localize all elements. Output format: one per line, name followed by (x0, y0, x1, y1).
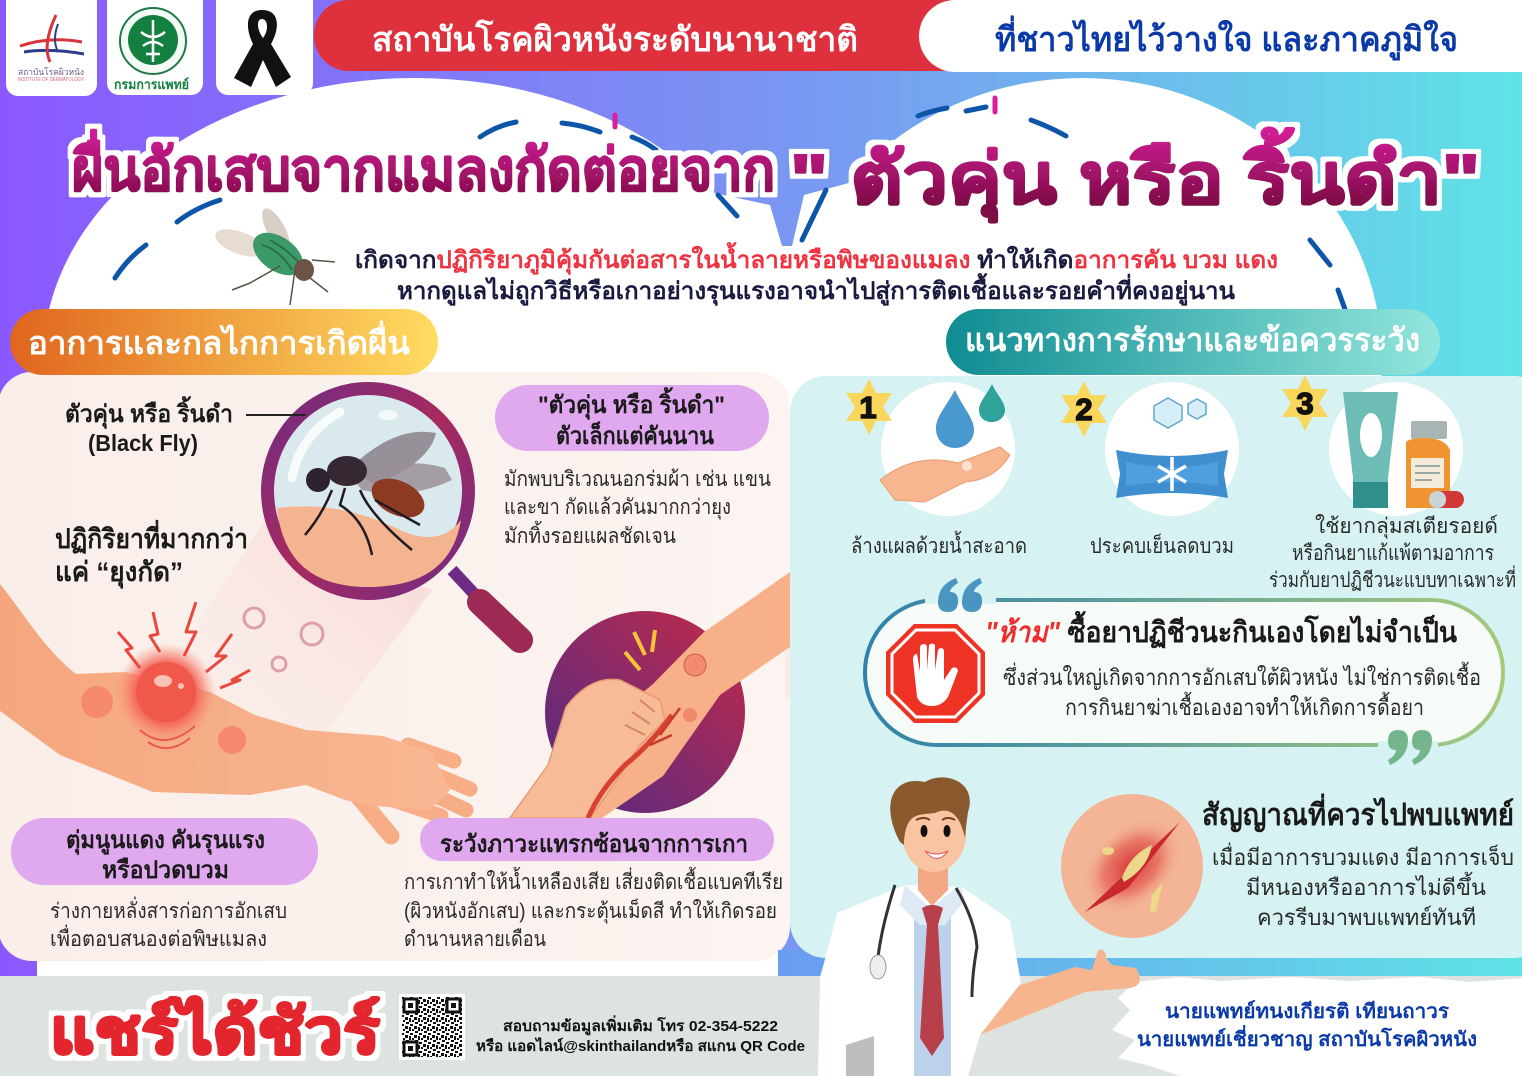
contact details (476, 1015, 805, 1055)
illustration: magnifier with black fly (261, 382, 520, 640)
text: where bites appear: และขา กัดแล้วคันมากกว่ายุง (504, 496, 731, 520)
callout: scratching complications (420, 818, 774, 861)
illustration: doctor (818, 777, 1140, 1076)
panel: treatment and cautions (778, 375, 1522, 977)
white slogan banner: ที่ชาวไทยไว้วางใจ และภาคภูมิใจ (995, 15, 1458, 61)
black fly (305, 432, 452, 555)
text: where bites appear (504, 468, 771, 548)
callout: bump and swelling (11, 818, 318, 885)
red banner: สถาบันโรคผิวหนังระดับนานาชาติ (372, 19, 858, 59)
callout: bump and swelling: ตุ่มนูนแดง คันรุนแรง (66, 827, 265, 856)
share slogan: แชร์ได้ชัวร์ (50, 996, 380, 1067)
callout: small but itchy: "ตัวคุ่น หรือ ริ้นดำ" (538, 386, 725, 421)
doctor credit (1137, 1000, 1477, 1051)
text: inflammatory response (50, 896, 287, 951)
label: black fly: (Black Fly) (88, 430, 198, 456)
illustration: bitten arm (0, 584, 470, 836)
coat (818, 885, 1021, 1076)
arm (0, 584, 450, 810)
text: scratching effects: (ผิวหนังอักเสบ) และกระตุ้นเม็ดสี ทำให้เกิดรอย (404, 897, 777, 924)
warning text: ซึ่งส่วนใหญ่เกิดจากการอักเสบใต้ผิวหนัง ไม่ใช่การติดเชื้อ (1003, 662, 1481, 690)
logo: institute of dermatology: INSTITUTE OF DERMATOLOGY (18, 77, 85, 83)
frame gaps (925, 600, 1438, 745)
title (72, 127, 1480, 223)
text: scratching effects (404, 867, 783, 951)
pointer tail (785, 622, 842, 700)
qr code (399, 994, 465, 1060)
doctor credit: นายแพทย์เชี่ยวชาญ สถาบันโรคผิวหนัง (1137, 1024, 1477, 1051)
face (916, 818, 955, 858)
icon: opening quote (938, 578, 982, 612)
text: where bites appear: มักพบบริเวณนอกร่มผ้า เช่น แขน (504, 468, 771, 491)
intro line 1: เกิดจากปฏิกิริยาภูมิคุ้มกันต่อสารในน้ำลายหรือพิษของแมลง ทำให้เกิดอาการคัน บวม แดง (355, 241, 1278, 276)
magnifier light cone (175, 520, 432, 780)
head (902, 796, 966, 872)
warning box (865, 578, 1503, 765)
icon: mourning ribbon (216, 0, 313, 95)
text: when to see a doctor: เมื่อมีอาการบวมแดง มีอาการเจ็บ (1212, 842, 1514, 870)
section pill: treatment: แนวทางการรักษาและข้อควรระวัง (965, 322, 1420, 358)
text: when to see a doctor (1202, 793, 1514, 930)
title line part 2: " ตัวคุ่น หรือ ริ้นดำ" (790, 127, 1480, 223)
text: scratching effects: การเกาทำให้น้ำเหลืองเสีย เสี่ยงติดเชื้อแบคทีเรีย (404, 867, 783, 894)
icon: stop hand (886, 624, 985, 723)
fingers (357, 745, 470, 836)
logo: department of medical services (107, 0, 203, 95)
callout: small but itchy: ตัวเล็กแต่คันนาน (556, 421, 715, 450)
warning box frame (865, 600, 1503, 745)
callout: scratching complications: ระวังภาวะแทรกซ้อนจากการเกา (440, 831, 748, 858)
neck (918, 865, 948, 906)
text: when to see a doctor: มีหนองหรืออาการไม่ดีขึ้น (1246, 872, 1486, 900)
shirt (914, 905, 951, 1076)
arm and hand (977, 950, 1140, 1036)
illustration: infected wound (1061, 794, 1203, 938)
step 2: cold compress: 2 (1075, 392, 1093, 427)
panel background (0, 372, 790, 961)
panel background (790, 376, 1522, 958)
section pill: treatment (946, 309, 1440, 375)
logo: institute of dermatology: สถาบันโรคผิวหนัง (18, 67, 84, 77)
footer (0, 976, 1522, 1076)
callout: small but itchy (495, 385, 769, 451)
icon: green fly (212, 205, 335, 305)
logo: department of medical services: กรมการแพทย์ (114, 77, 189, 92)
heading: stronger reaction (55, 519, 248, 589)
hair (890, 777, 970, 845)
heading: stronger reaction: ปฏิกิริยาที่มากกว่า (55, 519, 248, 554)
dashed cloud outline (115, 98, 1346, 312)
footer background (0, 976, 1522, 1076)
white slogan banner (919, 0, 1522, 72)
intro line 2: หากดูแลไม่ถูกวิธีหรือเกาอย่างรุนแรงอาจนำไปสู่การติดเชื้อและรอยคำที่คงอยู่นาน (397, 272, 1236, 307)
icon: closing quote (1388, 730, 1432, 765)
callout: bump and swelling: หรือปวดบวม (102, 857, 229, 884)
stethoscope (878, 885, 977, 997)
label: black fly (65, 395, 233, 456)
step 1: wash: 1 (859, 390, 877, 425)
folder (846, 1036, 874, 1076)
white brush patch (1112, 977, 1522, 1076)
contact details: หรือ แอดไลน์@skinthailandหรือ สแกน QR Code (476, 1036, 805, 1055)
logo: institute of dermatology (6, 0, 97, 96)
warning text: การกินยาฆ่าเชื้อเองอาจทำให้เกิดการดื้อยา (1065, 692, 1424, 720)
text: when to see a doctor: ควรรีบมาพบแพทย์ทันที (1257, 905, 1476, 930)
text: inflammatory response: ร่างกายหลั่งสารก่อการอักเสบ (50, 896, 287, 923)
illustration: scratching arm (510, 565, 800, 818)
tie (920, 905, 944, 1056)
step 3: medicine: ใช้ยากลุ่มสเตียรอยด์ (1315, 514, 1498, 539)
heading: stronger reaction: แค่ “ยุงกัด” (55, 557, 183, 589)
step 1: wash: ล้างแผลด้วยน้ำสะอาด (851, 531, 1027, 558)
step 2: cold compress: ประคบเย็นลดบวม (1090, 532, 1234, 558)
section pill: symptoms (10, 309, 438, 375)
step 2: cold compress (1061, 381, 1239, 558)
step 1: wash (846, 379, 1027, 558)
warning heading: "ห้าม" ซื้อยาปฏิชีวนะกินเองโดยไม่จำเป็น (985, 610, 1457, 649)
section pill: symptoms: อาการและกลไกการเกิดผื่น (28, 320, 410, 361)
title line part 1: ผื่นอักเสบจากแมลงกัดต่อยจาก (72, 129, 775, 203)
doctor credit: นายแพทย์ทนงเกียรติ เทียนถาวร (1165, 1000, 1449, 1023)
icon: pain rings (244, 608, 323, 671)
header bar (6, 0, 1522, 96)
contact details: สอบถามข้อมูลเพิ่มเติม โทร 02-354-5222 (503, 1015, 778, 1036)
red banner (314, 0, 994, 71)
strip below panel (778, 950, 1522, 977)
step 3: medicine: 3 (1296, 386, 1314, 421)
icon: pain lightning bolts (118, 602, 250, 688)
step 3: medicine (1269, 375, 1516, 592)
text: where bites appear: มักทิ้งรอยแผลชัดเจน (504, 521, 676, 548)
label: black fly: ตัวคุ่น หรือ ริ้นดำ (65, 395, 233, 430)
text: scratching effects: ดำนานหลายเดือน (404, 928, 546, 951)
stethoscope disc (870, 955, 886, 979)
text: inflammatory response: เพื่อตอบสนองต่อพิษแมลง (50, 924, 267, 951)
warning text (1003, 662, 1481, 720)
panel: symptoms and mechanism (0, 372, 842, 961)
callout line (246, 414, 306, 416)
intro text (355, 241, 1278, 307)
white cloud backdrop (37, 78, 1382, 980)
